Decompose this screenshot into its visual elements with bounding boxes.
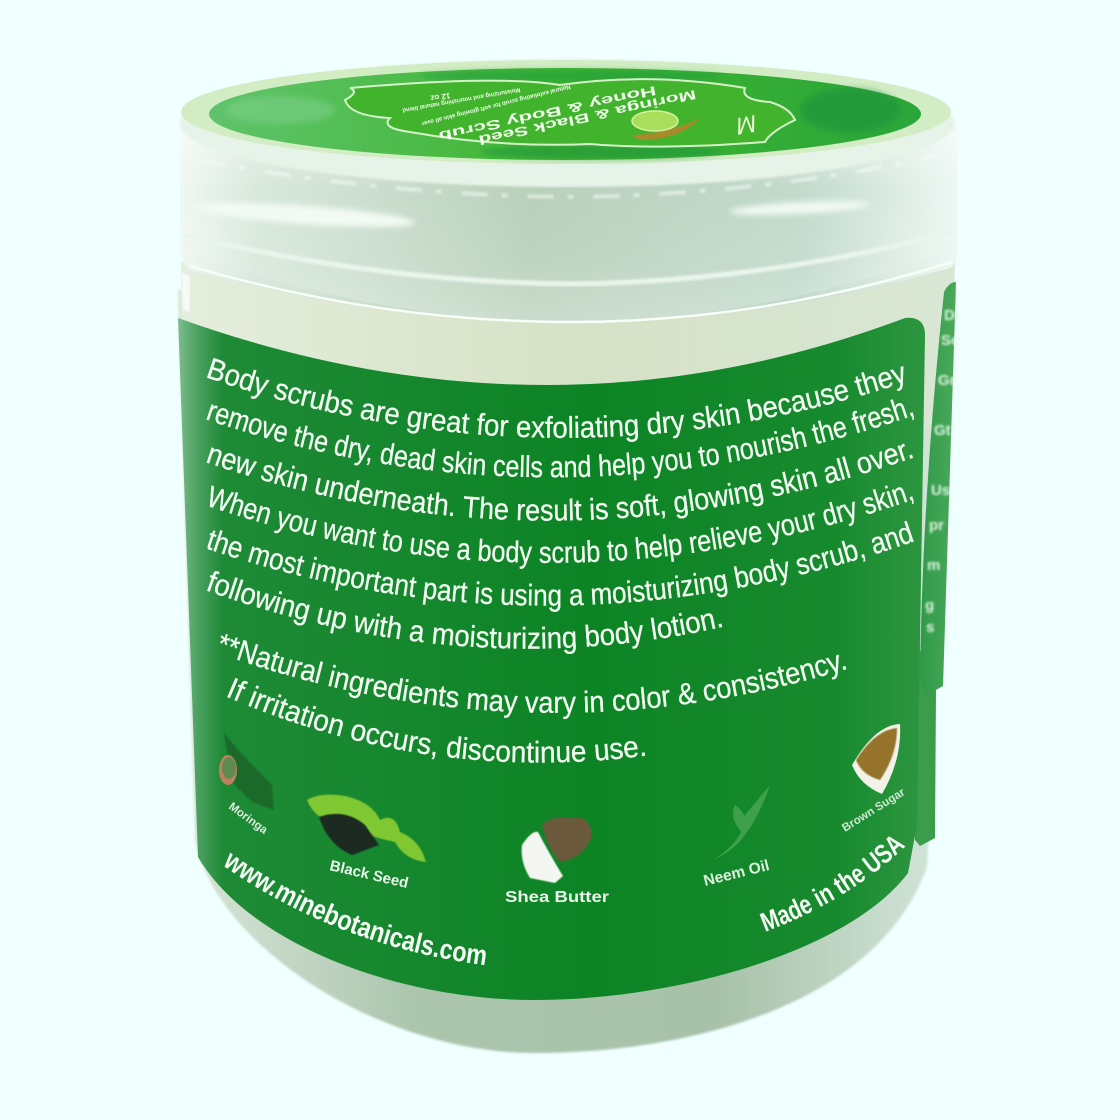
body paragraph: following up with a moisturizing body lotion. [207, 571, 722, 654]
lid highlight left [195, 198, 415, 232]
body paragraph: new skin underneath. The result is soft, glowing skin all over. [206, 444, 913, 521]
lid highlight right [730, 198, 870, 218]
top label text: Honey & Body Scrub [437, 83, 657, 144]
top label text: Moringa & Black Seed [477, 87, 697, 148]
jar neck between lid and label [181, 262, 955, 430]
lid ridge [184, 232, 954, 284]
jar base [178, 290, 956, 1053]
ingredient: black seed [307, 795, 426, 892]
side label text: g [925, 597, 934, 614]
top label frame [345, 79, 795, 147]
top label text: Moisturizing and nourishing natural blend [401, 86, 521, 113]
main label [178, 318, 925, 1000]
side label text: Us [931, 482, 950, 499]
ingredient: moringa: Moringa [226, 801, 270, 837]
side label text: Gr [938, 372, 956, 389]
lid rim [180, 59, 954, 187]
website url: www.minebotanicals.com [224, 852, 486, 966]
side label text: Di [944, 307, 959, 324]
made in the usa: Made in the USA [760, 836, 906, 932]
side label text: s [926, 619, 934, 636]
side label strip lower [915, 640, 936, 846]
lid shading [180, 130, 958, 322]
body paragraph: remove the dry, dead skin cells and help you to nourish the fresh, [206, 399, 914, 480]
disclaimer note [220, 634, 846, 763]
body paragraph: the most important part is using a moisturizing body scrub, and [208, 520, 914, 612]
ingredient: shea butter: Shea Butter [505, 889, 609, 906]
top label logo [630, 109, 759, 140]
top label [209, 68, 921, 160]
top label text: 12 oz [430, 91, 451, 103]
body paragraph: Body scrubs are great for exfoliating dry skin because they [207, 358, 904, 442]
ingredient: brown sugar [840, 724, 908, 835]
top label swirls [225, 70, 900, 159]
ingredient: black seed: Black Seed [328, 857, 410, 892]
side label text: Gt [934, 422, 951, 439]
lid rim inner [181, 60, 951, 164]
side label text: pr [929, 517, 944, 534]
lid body [180, 110, 958, 322]
neck highlight left [181, 272, 190, 312]
top label text [401, 83, 697, 148]
body paragraph [206, 358, 914, 654]
ingredient: neem oil: Neem Oil [702, 857, 771, 890]
side label text: Sc [941, 332, 959, 349]
disclaimer note: **Natural ingredients may vary in color & consistency. [220, 634, 846, 720]
ingredient: neem oil [702, 785, 771, 890]
ingredient: moringa [219, 733, 274, 837]
ingredient: brown sugar: Brown Sugar [840, 786, 908, 835]
body paragraph: When you want to use a body scrub to help relieve your dry skin, [210, 485, 914, 569]
disclaimer note: If irritation occurs, discontinue use. [227, 678, 646, 763]
side label text: m [927, 557, 940, 574]
lid bottom white edge [190, 262, 952, 322]
side label text [925, 307, 959, 636]
top label logo: M [734, 109, 759, 139]
ingredient: shea butter [505, 817, 609, 906]
top label text: Natural exfoliating scrub for soft glowing skin all over [420, 83, 571, 126]
side label on right [920, 282, 956, 696]
lid rim thread marks [200, 155, 940, 197]
